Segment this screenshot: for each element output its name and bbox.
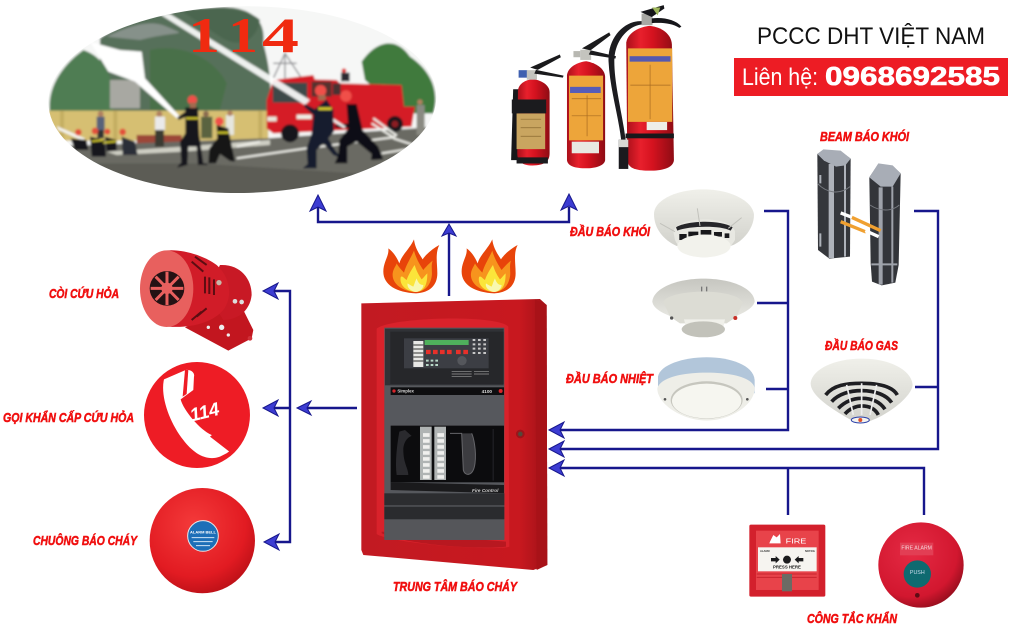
label: alarm bell: CHUÔNG BÁO CHÁY xyxy=(33,533,138,548)
icon: manual call point xyxy=(749,525,825,597)
door lock xyxy=(516,430,525,438)
bystanders xyxy=(97,99,425,147)
icon: emergency call 114 xyxy=(144,362,250,468)
label: smoke detector: ĐẦU BÁO KHÓI xyxy=(570,224,650,239)
medium extinguisher xyxy=(567,32,616,168)
left beam unit xyxy=(817,149,851,259)
icon: smoke detector xyxy=(654,189,754,257)
label: control panel: TRUNG TÂM BÁO CHÁY xyxy=(393,579,518,594)
icon: alarm bell xyxy=(150,488,255,593)
label: emergency call: GỌI KHẨN CẤP CỨU HỎA xyxy=(3,410,134,425)
icon: manual call point: NOTICE xyxy=(805,549,815,553)
fire truck xyxy=(267,68,415,142)
kneeling crew xyxy=(71,128,138,157)
heading: 114: 1 xyxy=(228,7,258,63)
telephone section xyxy=(391,426,504,482)
heading: 114: 1 xyxy=(188,7,220,63)
icon: flame left xyxy=(383,239,439,293)
label: siren: CÒI CỨU HỎA xyxy=(49,286,119,301)
header: contact banner: 0968692585 xyxy=(825,61,1000,91)
icon: push button fire alarm xyxy=(878,522,964,608)
right beam unit xyxy=(869,163,901,285)
lower strip and louvres xyxy=(384,482,504,539)
firefighter 2 xyxy=(208,117,235,163)
header: company name: PCCC DHT VIỆT NAM xyxy=(757,23,985,50)
arrows: smoke and heat detector input xyxy=(549,211,788,438)
arrows: output to siren, phone, bell xyxy=(263,283,357,550)
heading: 114: 4 xyxy=(262,7,299,63)
label: gas detector: ĐẦU BÁO GAS xyxy=(825,338,899,353)
fire extinguishers xyxy=(511,5,681,171)
icon: emergency call 114: 114 xyxy=(188,398,222,426)
brand strip xyxy=(391,387,504,395)
icon: beam smoke detector xyxy=(817,149,901,285)
brand strip: Simplex xyxy=(397,389,415,394)
label: emergency switch: CÔNG TẮC KHẨN xyxy=(807,611,898,626)
icon: gas detector xyxy=(811,359,913,423)
firefighter 3 xyxy=(303,85,342,168)
lower strip and louvres: Fire Control xyxy=(472,488,499,493)
icon: fire siren xyxy=(140,250,253,351)
icon: multi-sensor detector xyxy=(652,279,755,337)
photo: firefighters spraying water, oval xyxy=(40,0,440,200)
arrows: manual call point input xyxy=(549,460,924,515)
brand strip: 4100 xyxy=(482,389,492,394)
large extinguisher xyxy=(608,5,681,171)
icon: push button fire alarm: FIRE ALARM xyxy=(901,545,932,551)
icon: manual call point: ALARM xyxy=(760,549,770,553)
header: contact banner xyxy=(734,58,1008,96)
firefighter 4 xyxy=(333,90,383,163)
small extinguisher xyxy=(511,54,564,166)
arrows: output to firefighters and extinguishers xyxy=(310,194,577,296)
icon: push button fire alarm: PUSH xyxy=(910,570,925,576)
icon: manual call point: PRESS HERE xyxy=(773,565,801,570)
firefighter 1 xyxy=(177,95,207,168)
light beams xyxy=(841,217,881,232)
label: heat detector: ĐẦU BÁO NHIỆT xyxy=(566,371,654,386)
arrows: beam and gas detector input xyxy=(549,211,938,457)
icon: manual call point: FIRE xyxy=(786,537,806,546)
icon: alarm bell: ALARM BELL xyxy=(190,529,216,534)
hoses xyxy=(237,118,413,158)
display section xyxy=(384,328,504,540)
heading: 114 xyxy=(188,7,299,63)
label: beam detector: BEAM BÁO KHÓI xyxy=(820,129,909,144)
header: contact banner: Liên hệ: xyxy=(742,64,818,91)
water jets xyxy=(57,13,310,141)
icon: heat detector xyxy=(657,357,755,421)
panel: fire alarm control cabinet xyxy=(361,299,547,570)
icon: flame right xyxy=(462,239,518,293)
